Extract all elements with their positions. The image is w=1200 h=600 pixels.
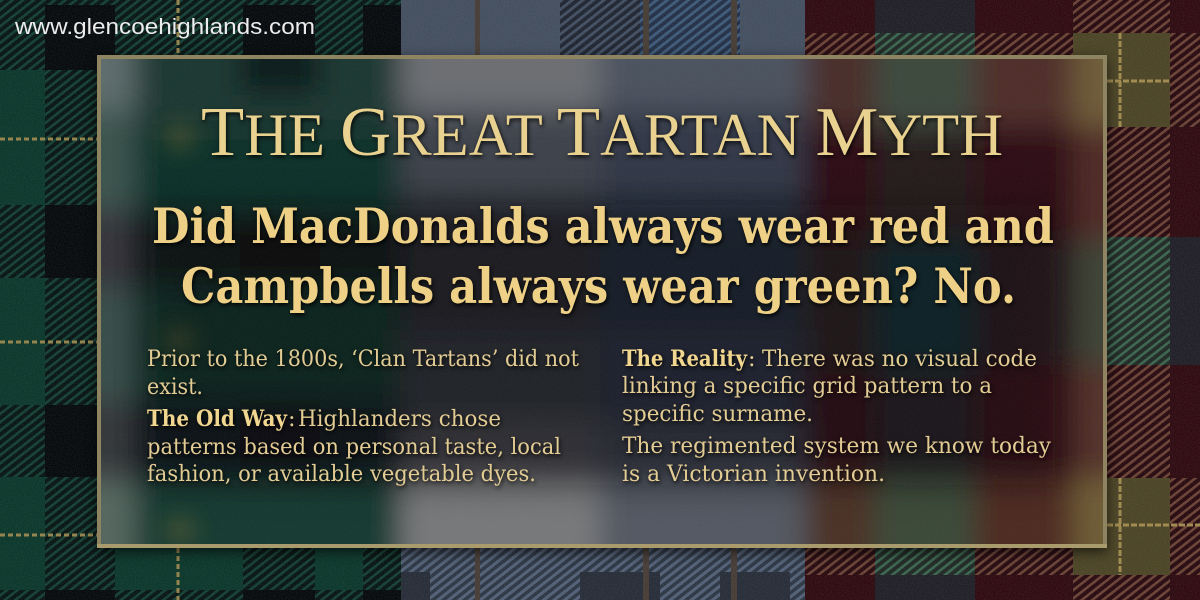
text block: right column (622, 346, 1051, 487)
text block: right column: The regimented system we know today (622, 433, 1051, 459)
text block: right column: : (748, 346, 756, 372)
text block: right column: There was no visual code (762, 346, 1037, 372)
right section (805, 0, 1200, 600)
text block: right column: linking a specific grid pattern to a (622, 373, 992, 399)
panel: frosted glass plaque (89, 51, 1114, 560)
text block: left column: The Old Way (147, 406, 288, 432)
text block: left column: Prior to the 1800s, ‘Clan Tartans’ did not (147, 346, 579, 372)
centre section (401, 0, 805, 600)
title: THE GREAT TARTAN MYTH (201, 94, 1003, 171)
text block: right column: specific surname. (622, 401, 813, 427)
right (805, 10, 875, 127)
text block: left column: Highlanders chose (298, 406, 501, 432)
website url: www.glencoehighlands.com (14, 14, 315, 39)
text block: right column: The Reality (622, 346, 748, 372)
text block: left column: : (288, 406, 296, 432)
text block: left column: patterns based on personal taste, local (147, 434, 561, 460)
headline question: Campbells always wear green? No. (181, 257, 1016, 315)
left (101, 59, 156, 129)
text block: left column: fashion, or available vegetable dyes. (147, 461, 536, 487)
centre (377, 59, 826, 131)
text block: left column (147, 346, 579, 487)
text block: right column: is a Victorian invention. (622, 461, 885, 487)
left section (0, 0, 401, 600)
text block: left column: exist. (147, 374, 203, 400)
headline question: Did MacDonalds always wear red and (152, 197, 1054, 255)
headline question (152, 197, 1054, 315)
